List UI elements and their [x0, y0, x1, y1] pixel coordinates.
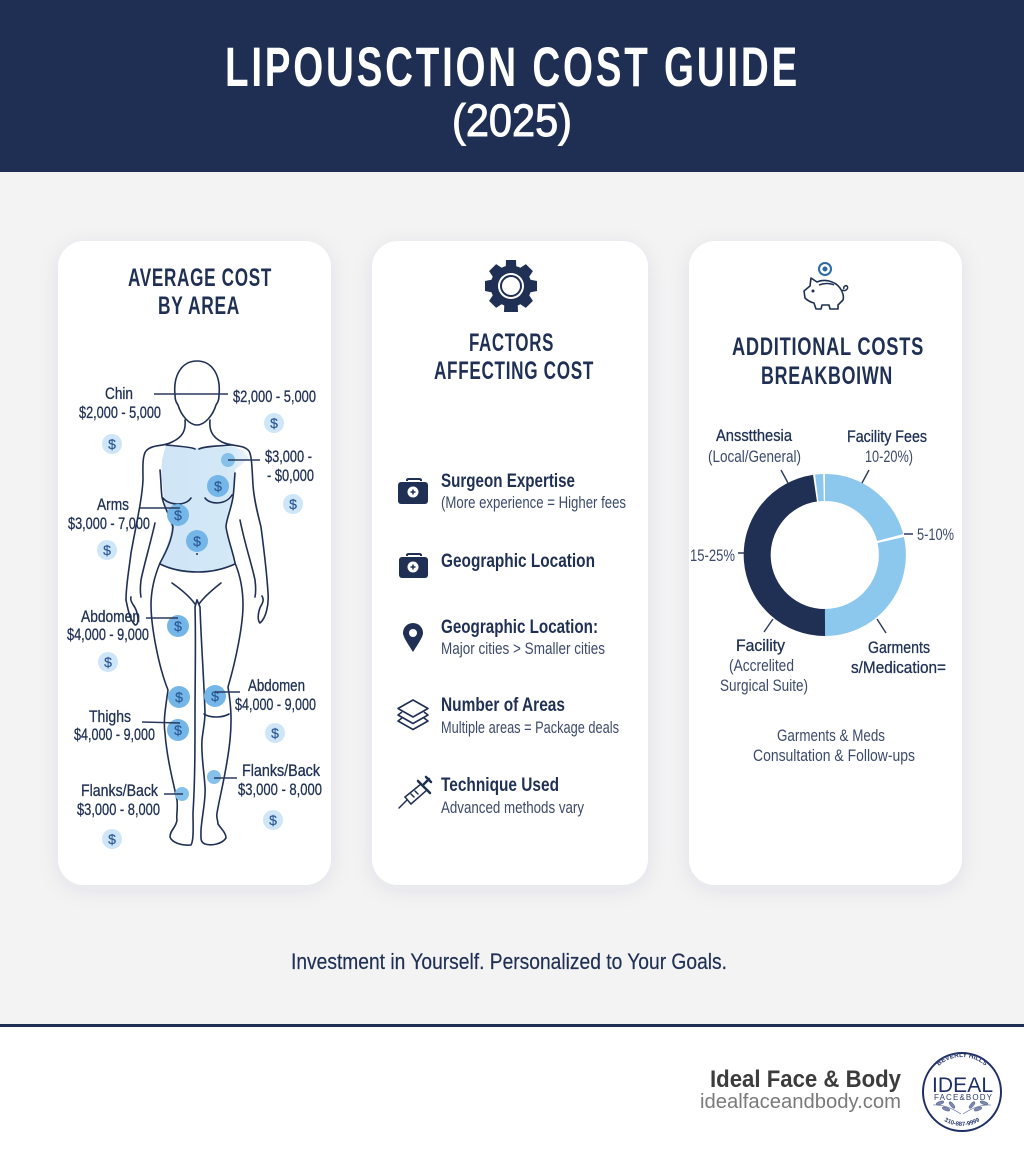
donut labels: s/Medication=: [851, 659, 946, 677]
factor: number of areas: Number of Areas: [441, 694, 565, 716]
cost markers: $: [108, 831, 116, 847]
donut labels: Garments: [868, 639, 930, 657]
cost markers: $: [214, 478, 222, 494]
icon: map pin: [403, 623, 423, 652]
area labels: [67, 385, 322, 819]
donut labels: Surgical Suite): [720, 677, 808, 695]
area labels: Thighs: [89, 708, 131, 726]
panel heading: BREAKBOIWN: [761, 362, 893, 390]
panel heading: [732, 333, 924, 390]
body figure: [126, 361, 268, 845]
factor: technique used: [441, 774, 585, 817]
panel heading: ADDITIONAL COSTS: [732, 333, 924, 361]
factor: number of areas: [441, 694, 619, 737]
donut callout lines: [738, 470, 913, 633]
cost markers: $: [175, 689, 183, 705]
area labels: $3,000 - 8,000: [77, 801, 160, 819]
cost markers: $: [174, 722, 182, 738]
donut labels: 15-25%: [690, 547, 735, 565]
area labels: Flanks/Back: [81, 782, 159, 800]
logo badge: BEVERLY HILLS: [936, 1052, 987, 1066]
icon: medical case: [398, 479, 428, 504]
area labels: $3,000 - 7,000: [68, 515, 150, 533]
panel heading: AFFECTING COST: [434, 357, 594, 385]
panel: additional costs breakdown: [689, 241, 962, 885]
donut labels: Ansstthesia: [716, 427, 793, 445]
brand name: Ideal Face & Body: [710, 1066, 902, 1093]
panel heading: [434, 329, 594, 385]
logo badge: 310-887-9999: [944, 1118, 980, 1126]
factor: geographic location detail: Geographic Location:: [441, 616, 598, 638]
year subtitle: (2025): [452, 95, 572, 146]
cost markers: $: [193, 533, 201, 549]
panel: factors affecting cost: [372, 241, 648, 885]
cost markers: $: [269, 812, 277, 828]
additional items: [753, 727, 915, 765]
factor: technique used: Technique Used: [441, 774, 559, 796]
cost markers: $: [104, 654, 112, 670]
panel: average cost by area: [58, 241, 331, 885]
cost markers: $: [108, 436, 116, 452]
area labels: $2,000 - 5,000: [233, 388, 316, 406]
cost markers: $: [174, 618, 182, 634]
logo badge: IDEAL: [932, 1074, 993, 1097]
factor: surgeon expertise: (More experience = Higher fees: [441, 494, 626, 512]
additional items: Consultation & Follow-ups: [753, 747, 915, 765]
area labels: Chin: [105, 385, 133, 403]
cost markers: [97, 413, 303, 849]
donut labels: (Accrelited: [729, 657, 794, 675]
icon: medical case: [399, 554, 428, 578]
factor: surgeon expertise: [441, 470, 626, 512]
icon: layers: [398, 700, 428, 730]
area labels: Arms: [97, 496, 129, 514]
area labels: Abdomen: [248, 677, 305, 695]
donut labels: (Local/General): [708, 448, 801, 466]
icon: syringe: [399, 777, 431, 808]
panel heading: AVERAGE COST: [128, 264, 272, 292]
factor: number of areas: Multiple areas = Package deals: [441, 719, 619, 737]
area labels: Abdomen: [81, 608, 140, 626]
cost markers: $: [103, 542, 111, 558]
factor: geographic location: Geographic Location: [441, 550, 595, 572]
icon: gear: [485, 260, 537, 312]
donut labels: Facility Fees: [847, 428, 927, 446]
leader lines: [140, 394, 260, 794]
header banner: [0, 0, 1024, 172]
panel heading: [128, 264, 272, 320]
website: idealfaceandbody.com: [700, 1091, 901, 1113]
area labels: $4,000 - 9,000: [67, 626, 149, 644]
cost markers: $: [174, 507, 182, 523]
cost markers: $: [271, 725, 279, 741]
area labels: $4,000 - 9,000: [235, 696, 316, 714]
factor: geographic location detail: Major cities > Smaller cities: [441, 640, 605, 658]
donut labels: 5-10%: [917, 526, 954, 544]
additional items: Garments & Meds: [777, 727, 885, 745]
panel heading: FACTORS: [469, 329, 554, 357]
logo badge: FACE&BODY: [934, 1093, 993, 1102]
cost markers: $: [289, 496, 297, 512]
area labels: $2,000 - 5,000: [79, 404, 161, 422]
area labels: - $0,000: [267, 467, 314, 485]
icon: piggy bank with coin: [804, 263, 848, 309]
cost markers: $: [211, 688, 219, 704]
area labels: $4,000 - 9,000: [74, 726, 155, 744]
factor: geographic location detail: [441, 616, 605, 658]
footer: [0, 1024, 1024, 1154]
donut chart: [757, 488, 892, 623]
tagline: Investment in Yourself. Personalized to Your Goals.: [291, 949, 727, 974]
area labels: $3,000 -: [265, 448, 312, 466]
cost markers: $: [270, 415, 278, 431]
factor: surgeon expertise: Surgeon Expertise: [441, 470, 575, 492]
area labels: $3,000 - 8,000: [238, 781, 322, 799]
logo badge: [922, 1052, 1002, 1132]
factor: technique used: Advanced methods vary: [441, 799, 585, 817]
donut labels: [690, 427, 954, 695]
area labels: Flanks/Back: [242, 762, 321, 780]
donut labels: 10-20%): [865, 448, 913, 466]
donut labels: Facility: [736, 637, 786, 655]
panel heading: BY AREA: [158, 292, 240, 320]
